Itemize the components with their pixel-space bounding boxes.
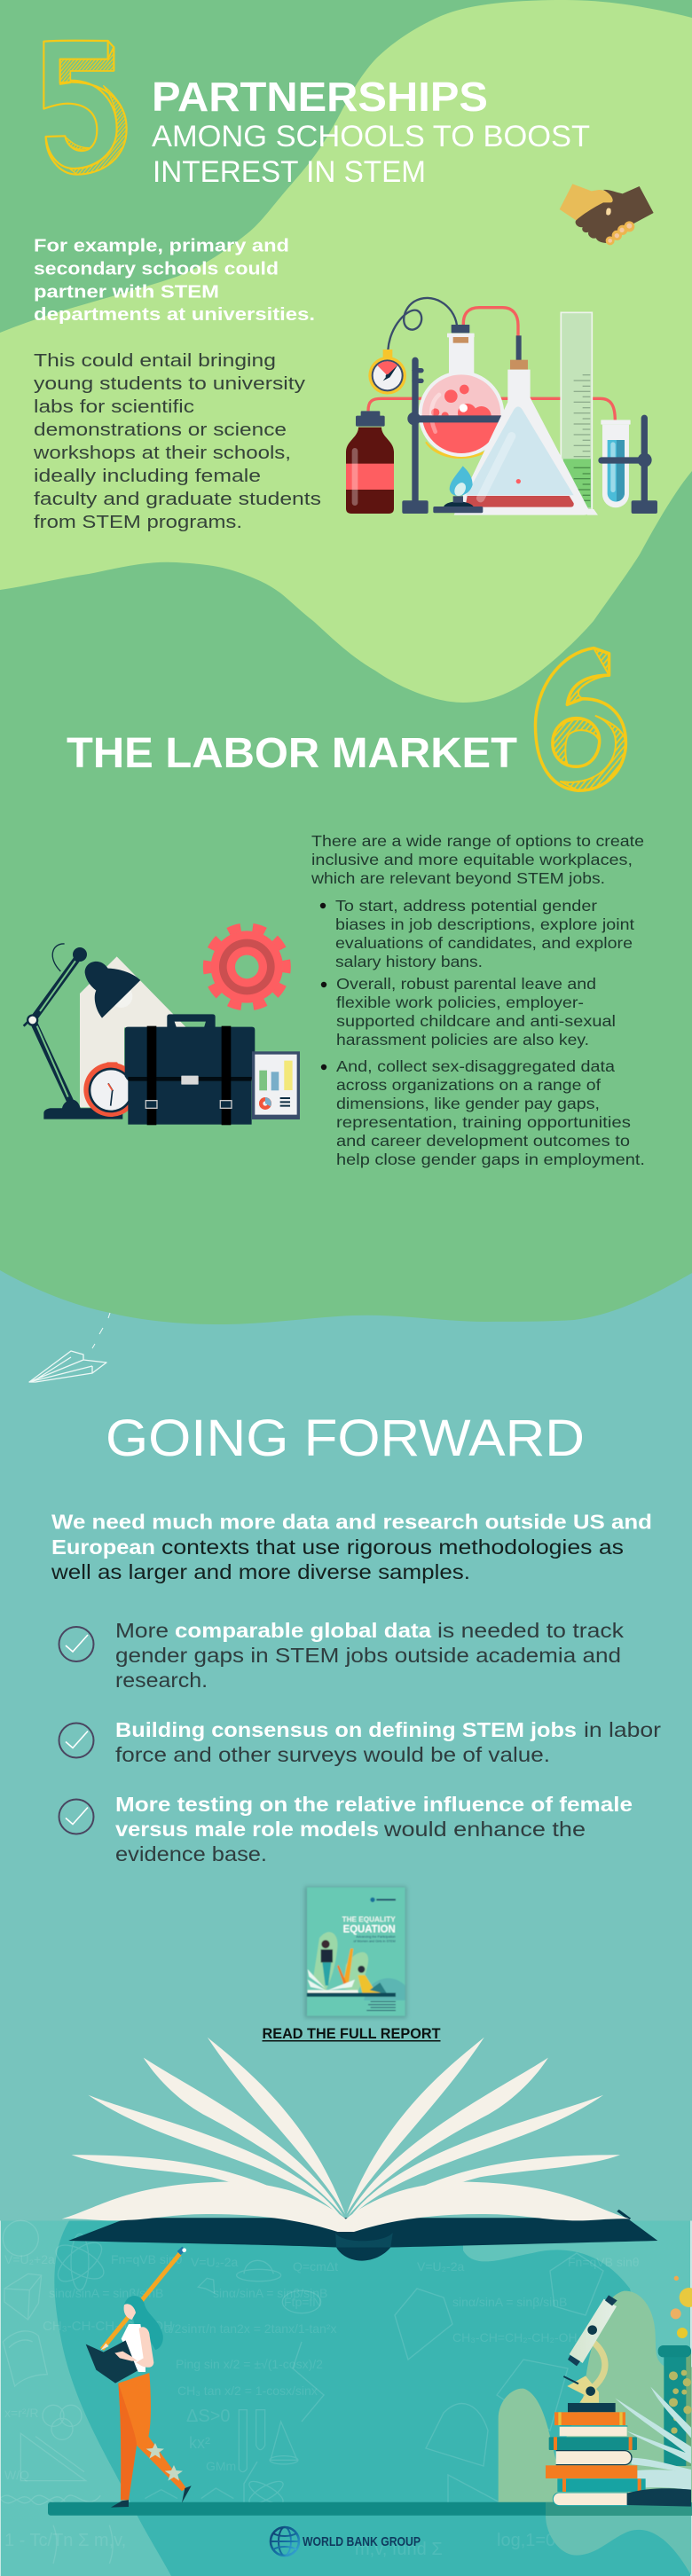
text: partnerships body: demonstrations or science bbox=[34, 420, 287, 440]
science doodles pattern bbox=[0, 2220, 603, 2564]
logo: world bank group: WORLD BANK GROUP bbox=[303, 2534, 421, 2549]
heading: going forward: GOING FORWARD bbox=[106, 1410, 585, 1467]
text: going forward lead bbox=[51, 1510, 652, 1583]
science formulas: x=r²/R bbox=[4, 2406, 39, 2420]
icon: paper plane bbox=[29, 1313, 110, 1382]
text: partnerships body: from STEM programs. bbox=[34, 513, 242, 532]
bullet: job descriptions bbox=[320, 897, 634, 970]
science formulas: CH₃-CH=CH₂-CH₂-OH bbox=[452, 2330, 578, 2344]
science formulas: W/Q bbox=[4, 2468, 29, 2482]
check item: role models: More testing on the relative influence of female bbox=[115, 1793, 633, 1816]
check item: defining STEM jobs bbox=[59, 1718, 661, 1766]
section background: teal going forward bbox=[0, 1270, 692, 2227]
check item: role models: would enhance the bbox=[383, 1818, 586, 1841]
science formulas: a/2sinπ/n tan2x = 2tanx/1-tan²x bbox=[164, 2321, 337, 2336]
bullet: sex-disaggregated data bbox=[321, 1057, 645, 1168]
heading: partnerships bbox=[152, 74, 590, 189]
text: labor market intro: which are relevant beyond STEM jobs. bbox=[311, 869, 605, 887]
illustration: open book bbox=[62, 2038, 657, 2261]
report cover: Advancing the Participation bbox=[356, 1935, 396, 1938]
science formulas bbox=[4, 2252, 640, 2559]
text: partnerships lead: For example, primary and bbox=[34, 236, 289, 255]
report cover: of Women and Girls in STEM bbox=[353, 1940, 396, 1944]
illustration: microscope, book stack, plant and jar bbox=[546, 2276, 692, 2507]
check item: role models bbox=[59, 1793, 633, 1865]
science formulas: m,v, fund Σ bbox=[355, 2540, 443, 2559]
bullet: job descriptions: salary history bans. bbox=[335, 953, 483, 970]
science formulas: sinα/sinA = sinβ/sinB bbox=[452, 2295, 567, 2309]
science formulas: 1 - Tc/Tn Σ m,v, bbox=[4, 2531, 126, 2550]
text: partnerships lead: partner with STEM bbox=[34, 282, 219, 302]
report cover: THE EQUALITY bbox=[342, 1915, 396, 1924]
logo: world bank group bbox=[271, 2527, 421, 2556]
bullet: sex-disaggregated data: dimensions, like gender pay gaps, bbox=[336, 1095, 600, 1112]
bullet: leave and work policies: supported childcare and anti-sexual bbox=[336, 1012, 616, 1030]
text: going forward lead: We need much more data and research outside US and bbox=[51, 1510, 652, 1533]
science formulas: log,1=0 χ²+(y bbox=[497, 2531, 601, 2550]
check item: global data: More bbox=[115, 1619, 169, 1642]
science formulas: GMm bbox=[206, 2459, 236, 2473]
science formulas: Fn=qVB sinθ bbox=[111, 2252, 183, 2266]
text: labor market intro bbox=[311, 832, 644, 887]
lighter organic shapes at right of scene bbox=[499, 2291, 692, 2575]
text: going forward lead: European bbox=[51, 1535, 155, 1559]
illustration: desk lamp, briefcase, gear, clock and tablet bbox=[24, 921, 300, 1125]
bullet: leave and work policies: harassment policies are also key. bbox=[336, 1031, 589, 1048]
number 5 bbox=[43, 41, 127, 175]
text: partnerships lead: secondary schools could bbox=[34, 259, 279, 279]
bullet: sex-disaggregated data: and career development outcomes to bbox=[336, 1132, 630, 1150]
heading: partnerships: PARTNERSHIPS bbox=[152, 74, 488, 120]
illustration: woman with pencil and book bbox=[86, 2248, 192, 2508]
science formulas: Ping sin x/2 = ±√(1-cosx)/2 bbox=[176, 2357, 323, 2371]
science formulas: V=U₂+2a bbox=[4, 2252, 55, 2266]
text: partnerships body: ideally including female bbox=[34, 467, 261, 486]
science formulas: CH₃ tan x/2 = 1-cosx/sinx bbox=[177, 2384, 318, 2398]
bullet: job descriptions: evaluations of candidates, and explore bbox=[335, 934, 633, 952]
science formulas: sinα/sinA = sinβ/sinB bbox=[49, 2286, 163, 2300]
shelf bbox=[48, 2502, 692, 2516]
bullet: sex-disaggregated data: representation, training opportunities bbox=[336, 1113, 631, 1131]
heading: the labor market: THE LABOR MARKET bbox=[67, 730, 517, 777]
science formulas: sinα/sinA = sinβ/sinB bbox=[213, 2286, 327, 2300]
heading: partnerships: INTEREST IN STEM bbox=[153, 155, 426, 189]
light green blob bbox=[0, 0, 692, 703]
check item: role models: versus male role models bbox=[115, 1818, 379, 1841]
section background: green bbox=[0, 0, 692, 1331]
text: partnerships body bbox=[33, 351, 321, 532]
science formulas: Ftp=fN bbox=[284, 2295, 321, 2309]
check item: defining STEM jobs: force and other surveys would be of value. bbox=[115, 1743, 550, 1766]
check item: global data bbox=[59, 1619, 625, 1692]
check item: global data: gender gaps in STEM jobs outside academia and bbox=[115, 1644, 621, 1667]
science formulas: V=U₂-2a bbox=[191, 2255, 239, 2269]
text: partnerships body: This could entail bringing bbox=[34, 351, 276, 371]
bullet: sex-disaggregated data: across organizations on a range of bbox=[336, 1076, 601, 1094]
text: partnerships body: labs for scientific bbox=[34, 397, 194, 417]
bullet: leave and work policies bbox=[321, 975, 616, 1048]
report cover bbox=[304, 1887, 406, 2018]
science formulas: ΔS>0 bbox=[186, 2407, 231, 2426]
check item: defining STEM jobs: Building consensus on defining STEM jobs bbox=[115, 1718, 577, 1741]
text: labor market intro: There are a wide range of options to create bbox=[311, 832, 644, 850]
bottom scene background bbox=[0, 2221, 692, 2576]
heading: partnerships: AMONG SCHOOLS TO BOOST bbox=[152, 120, 590, 153]
bullet: job descriptions: To start, address potential gender bbox=[335, 897, 597, 915]
science formulas: V=U₂-2a bbox=[417, 2259, 465, 2274]
text: partnerships lead: departments at universities. bbox=[34, 305, 315, 325]
check item: global data: research. bbox=[115, 1669, 208, 1692]
icon: handshake bbox=[560, 184, 654, 245]
text: partnerships body: young students to university bbox=[34, 374, 305, 394]
science formulas: Q=cmΔt bbox=[293, 2259, 338, 2274]
check item: role models: evidence base. bbox=[115, 1842, 267, 1865]
number 6 bbox=[535, 648, 625, 790]
text: labor market intro: inclusive and more equitable workplaces, bbox=[311, 851, 633, 868]
bullet: leave and work policies: Overall, robust parental leave and bbox=[336, 975, 596, 993]
illustration: laboratory equipment bbox=[346, 298, 657, 515]
bullet: sex-disaggregated data: help close gender gaps in employment. bbox=[336, 1151, 645, 1168]
science formulas: Fn=qVB sinθ bbox=[568, 2255, 640, 2269]
text: partnerships lead bbox=[34, 236, 315, 325]
science formulas: kx² bbox=[189, 2434, 210, 2452]
text: going forward lead: contexts that use rigorous methodologies as bbox=[161, 1535, 624, 1559]
text: going forward lead: well as larger and more diverse samples. bbox=[51, 1560, 470, 1583]
science formulas: CH₃-CH-CH₂-CH₂-OH bbox=[43, 2319, 173, 2334]
link: read the full report: READ THE FULL REPORT bbox=[263, 2025, 441, 2042]
bullet: leave and work policies: flexible work policies, employer- bbox=[336, 993, 584, 1011]
check item: global data: comparable global data bbox=[175, 1619, 431, 1642]
bullet: job descriptions: biases in job descriptions, explore joint bbox=[335, 915, 634, 933]
text: partnerships body: faculty and graduate students bbox=[34, 490, 321, 509]
bullet: sex-disaggregated data: And, collect sex-disaggregated data bbox=[336, 1057, 615, 1075]
check item: defining STEM jobs: in labor bbox=[584, 1718, 661, 1741]
check item: global data: is needed to track bbox=[437, 1619, 625, 1642]
text: partnerships body: workshops at their schools, bbox=[33, 444, 291, 463]
report cover: EQUATION bbox=[343, 1922, 396, 1935]
